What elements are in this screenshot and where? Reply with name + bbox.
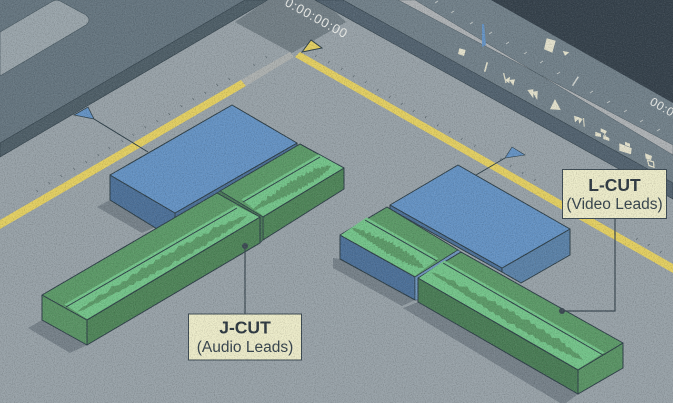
J-cut group <box>28 105 344 353</box>
waveform <box>428 265 587 365</box>
L-CUT callout <box>559 170 666 314</box>
audio clip long <box>418 252 623 394</box>
audio clip right <box>220 144 344 240</box>
audio clip left <box>340 207 458 300</box>
icon: toolbox <box>619 142 632 154</box>
clip gap <box>217 191 263 243</box>
icon: large square <box>544 38 556 53</box>
L-CUT callout: L-CUT <box>588 175 641 195</box>
audio clip long <box>42 193 260 345</box>
icon: play <box>550 99 561 110</box>
video clip <box>110 105 297 240</box>
icon: marker <box>485 62 487 72</box>
J-CUT callout <box>188 243 302 360</box>
icon: layers <box>645 153 654 167</box>
shadows <box>333 258 578 403</box>
video clip <box>390 165 570 283</box>
long tick <box>572 77 578 86</box>
timeline ruler: right segment <box>295 52 673 273</box>
icon: small triangle <box>563 51 569 56</box>
J-CUT callout: J-CUT <box>219 318 271 338</box>
scrub bar ticks <box>435 1 660 131</box>
clip gap <box>415 250 461 300</box>
editor panel: upper left <box>0 0 268 157</box>
icon: skip forward <box>574 116 585 127</box>
icon: link nodes <box>595 128 609 141</box>
J-CUT callout: (Audio Leads) <box>197 339 293 356</box>
flag: L-cut marker <box>476 147 525 175</box>
editor panel: upper right <box>315 0 673 199</box>
shadows <box>28 200 160 353</box>
icon: small square <box>458 48 466 56</box>
icon: skip back <box>503 73 515 86</box>
scrub bar <box>398 0 673 155</box>
L-CUT callout: (Video Leads) <box>566 196 663 213</box>
timecode panel <box>235 0 351 53</box>
source clip pill <box>0 0 89 76</box>
icon: rewind <box>527 89 538 100</box>
waveform <box>73 209 251 317</box>
L-cut group <box>333 165 623 403</box>
blue scrub marker <box>482 24 486 47</box>
timeline ruler: left segment <box>0 52 294 229</box>
playhead marker <box>302 40 322 52</box>
flag: J-cut in point <box>74 107 148 152</box>
